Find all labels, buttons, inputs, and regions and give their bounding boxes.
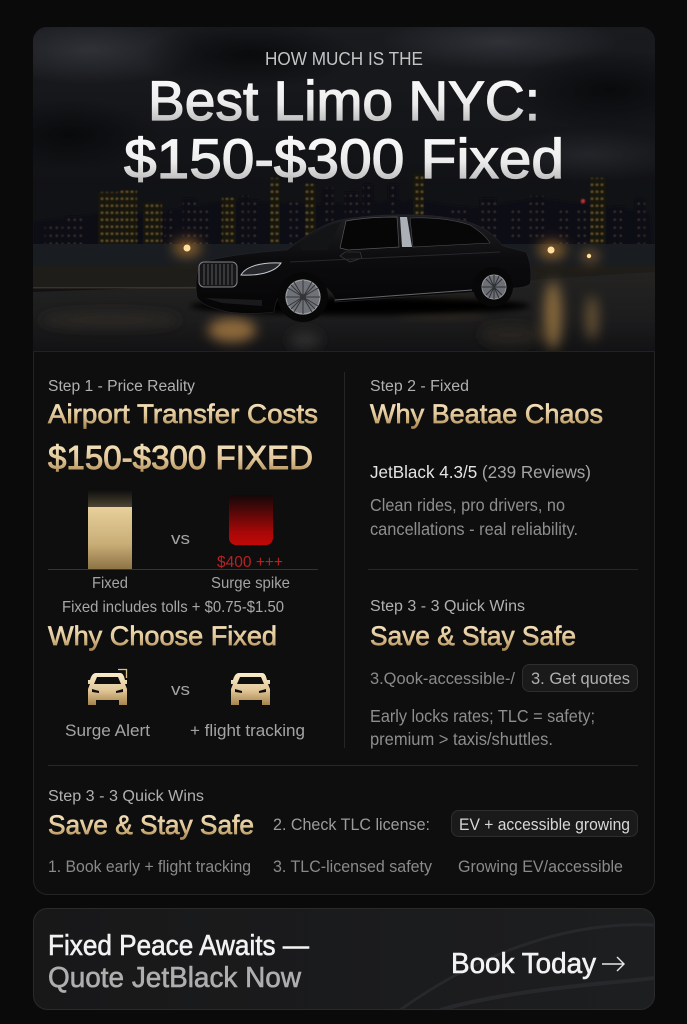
step 1 label: Step 1 - Price Reality xyxy=(48,378,195,395)
icon captions: Surge Alert xyxy=(65,721,150,740)
vs label: vs xyxy=(171,680,190,699)
panel: call to action xyxy=(34,908,655,1010)
tip: check license: 2. Check TLC license: xyxy=(273,815,430,834)
pill: get quotes: 3. Get quotes xyxy=(531,669,630,688)
panel: step 1 price reality xyxy=(48,378,318,740)
step 2 label: Step 2 - Fixed xyxy=(370,378,469,395)
pill: get quotes xyxy=(522,664,638,692)
safety note: Early locks rates; TLC = safety; xyxy=(370,706,595,726)
icon captions: + flight tracking xyxy=(190,721,305,740)
skyline xyxy=(38,174,646,244)
tips row: Growing EV/accessible xyxy=(458,857,623,876)
cta button text: Book Today xyxy=(451,948,597,980)
pill: ev and accessible: EV + accessible growing xyxy=(459,815,630,834)
tips row xyxy=(48,857,623,876)
why choose heading: Why Choose Fixed xyxy=(48,621,277,651)
price headline: $150-$300 FIXED xyxy=(48,439,313,476)
tips row: 1. Book early + flight tracking xyxy=(48,857,251,876)
cta headline: Quote JetBlack Now xyxy=(48,962,301,994)
cta headline: Fixed Peace Awaits — xyxy=(48,930,309,962)
pill: ev and accessible xyxy=(452,810,638,836)
icon: car with surge alert xyxy=(88,670,127,705)
safety note: premium > taxis/shuttles. xyxy=(370,729,553,749)
wet ground xyxy=(33,272,655,326)
fixed note: Fixed includes tolls + $0.75-$1.50 xyxy=(62,599,284,616)
hero title xyxy=(124,69,564,190)
icon captions xyxy=(65,721,305,740)
step 3 heading: Save & Stay Safe xyxy=(370,621,576,651)
arrow xyxy=(602,957,624,971)
bar chart: fixed vs surge xyxy=(48,490,318,592)
bar chart: fixed vs surge: Surge spike xyxy=(211,575,290,592)
grille and headlight xyxy=(199,262,237,287)
panel: step 3 quick wins right xyxy=(370,598,638,749)
step 1 heading: Airport Transfer Costs xyxy=(48,399,318,429)
main card panel xyxy=(34,28,654,894)
bar chart: fixed vs surge: $400 +++ xyxy=(217,554,283,571)
tips row: 3. TLC-licensed safety xyxy=(273,857,432,876)
step 2 heading: Why Beatae Chaos xyxy=(370,399,603,429)
review summary: Clean rides, pro drivers, no xyxy=(370,495,565,515)
hero bottom edge xyxy=(33,351,655,352)
panel: step 2 fixed xyxy=(370,378,603,539)
cta headline xyxy=(48,930,309,994)
bar chart: fixed vs surge: Fixed xyxy=(92,575,128,592)
rating: JetBlack 4.3/5 (239 Reviews) xyxy=(370,462,591,482)
limousine xyxy=(190,215,531,322)
wheels xyxy=(278,282,328,322)
hero title: $150-$300 Fixed xyxy=(124,127,564,190)
hero title: Best Limo NYC: xyxy=(148,69,540,132)
bottom step label: Step 3 - 3 Quick Wins xyxy=(48,788,204,805)
safety note xyxy=(370,706,595,749)
hero eyebrow: HOW MUCH IS THE xyxy=(265,48,423,69)
bar chart: fixed vs surge: vs xyxy=(171,529,190,548)
review summary xyxy=(370,495,578,539)
tip text: 3.Qook-accessible-/ xyxy=(370,669,515,688)
waterfront xyxy=(33,244,655,268)
review summary: cancellations - real reliability. xyxy=(370,519,578,539)
step 3 label: Step 3 - 3 Quick Wins xyxy=(370,598,525,615)
icon: car xyxy=(231,673,270,705)
bottom heading: Save & Stay Safe xyxy=(48,810,254,840)
panel: step 3 quick wins bottom xyxy=(48,788,638,876)
hero image: night skyline with limousine xyxy=(33,27,655,351)
